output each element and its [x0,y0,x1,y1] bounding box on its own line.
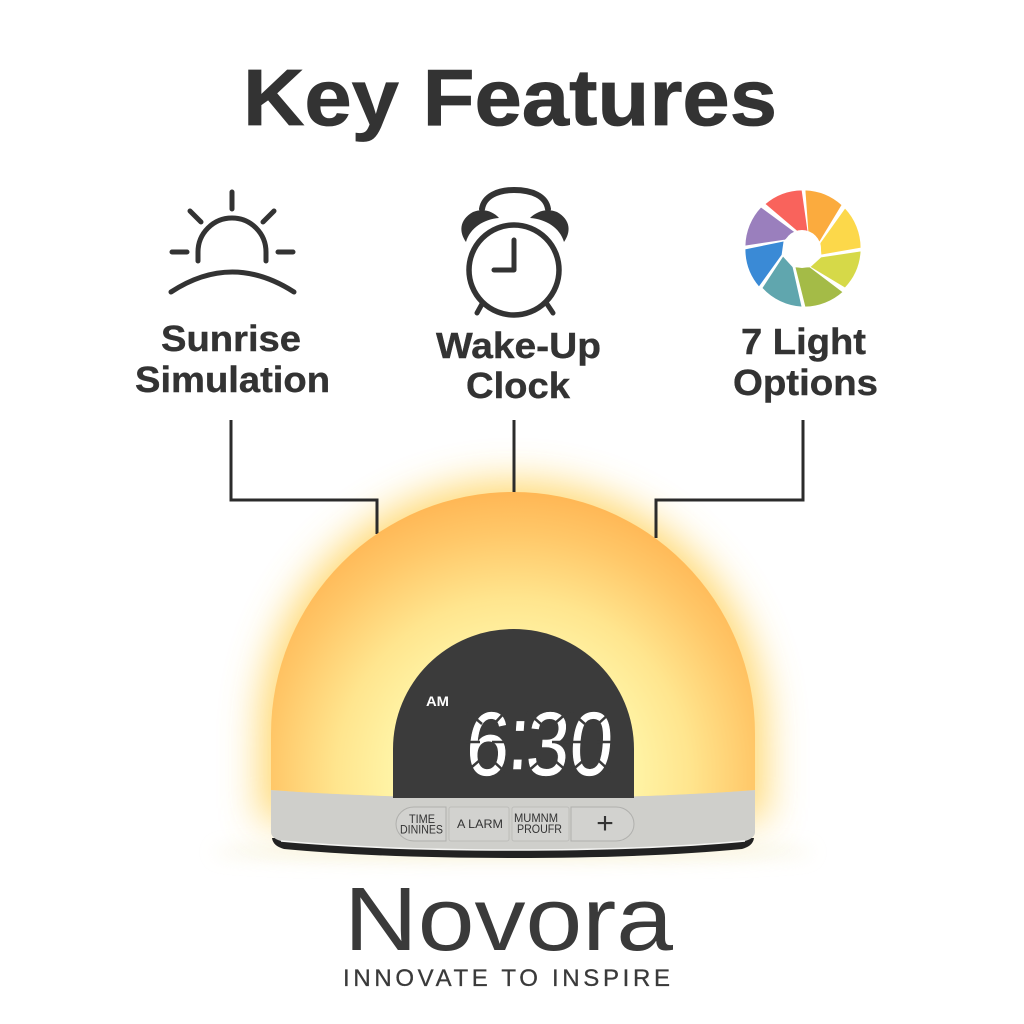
wordmark: Novora [344,870,674,970]
button: mumnm prouer: PROUFR [517,822,562,836]
label: Sunrise Simulation [135,318,330,400]
clock product [213,420,813,861]
segment gaps over time readout [466,712,613,772]
ground glow [213,843,813,861]
button: alarm: A LARM [457,817,503,831]
base rim highlight [281,841,745,850]
feature: wake-up clock [436,190,601,406]
button: time dinines [396,807,446,841]
button: plus [571,807,634,841]
label: Wake-Up Clock: Clock [466,365,571,406]
label: Wake-Up Clock: Wake-Up [436,325,601,366]
button: mumnm prouer [512,807,569,841]
title: Key Features [243,53,777,142]
dome glow [271,492,755,810]
button: plus: + [596,807,614,840]
brand logo [343,870,674,992]
tagline: INNOVATE TO INSPIRE [343,965,670,992]
glowing dome [271,492,755,798]
feature: sunrise simulation [135,192,330,400]
feature: 7 light options [733,190,878,403]
button: mumnm prouer: MUMNM [514,811,558,825]
icon: sunrise [171,192,294,292]
label: Sunrise Simulation: Sunrise [161,318,301,359]
AM label: AM [426,693,449,709]
button: alarm [449,807,509,841]
control buttons [396,807,634,841]
connector lines [231,420,803,538]
label: 7 Light Options [733,321,878,403]
button: time dinines: TIME [409,812,435,826]
label: 7 Light Options: Options [733,362,878,403]
button: time dinines: DININES [400,822,443,836]
display panel [393,629,634,798]
icon: colour wheel [745,190,861,307]
grey base [271,790,755,850]
label: Wake-Up Clock [436,325,601,406]
label: Sunrise Simulation: Simulation [135,359,330,400]
icon: alarm clock [461,190,569,315]
time readout: 6:30 [463,687,617,794]
label: 7 Light Options: 7 Light [741,321,866,362]
black foot [272,838,754,858]
